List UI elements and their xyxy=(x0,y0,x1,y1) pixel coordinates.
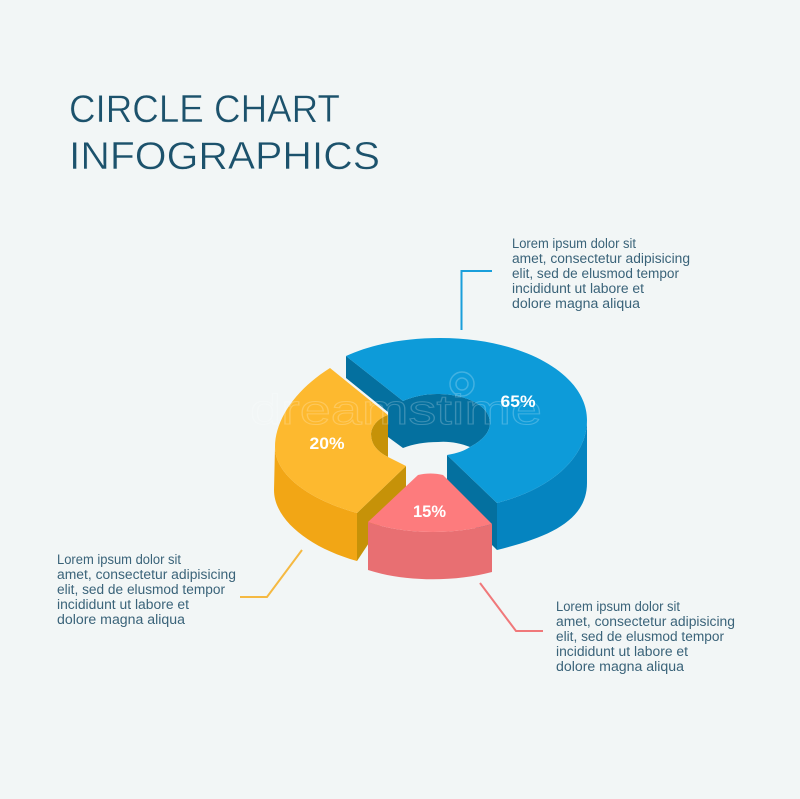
text block: bottom right: amet, consectetur adipisicing xyxy=(556,614,735,629)
text block: top right: amet, consectetur adipisicing xyxy=(512,251,690,266)
connector: blue xyxy=(462,271,492,330)
segment: yellow 20% xyxy=(274,368,406,561)
text block: left: amet, consectetur adipisicing xyxy=(57,567,236,582)
text block: bottom right: incididunt ut labore et xyxy=(556,644,688,659)
label: 15%: 15% xyxy=(413,502,446,521)
text block: top right: incididunt ut labore et xyxy=(512,281,644,296)
title: CIRCLE CHART xyxy=(69,88,340,131)
text block: top right: Lorem ipsum dolor sit xyxy=(512,236,636,251)
text block: left xyxy=(57,552,236,627)
title xyxy=(69,88,380,178)
text block: left: Lorem ipsum dolor sit xyxy=(57,552,181,567)
segment: blue 65% xyxy=(346,338,587,550)
text block: top right: elit, sed de elusmod tempor xyxy=(512,266,680,281)
text block: bottom right: dolore magna aliqua xyxy=(556,659,685,674)
title: INFOGRAPHICS xyxy=(69,135,380,178)
connector: yellow xyxy=(240,550,302,597)
text block: top right xyxy=(512,236,690,311)
text block: bottom right: elit, sed de elusmod tempor xyxy=(556,629,725,644)
label: 65%: 65% xyxy=(500,392,536,411)
text block: left: elit, sed de elusmod tempor xyxy=(57,582,226,597)
watermark: dreamstime xyxy=(250,386,542,433)
text block: bottom right xyxy=(556,599,735,674)
text block: left: dolore magna aliqua xyxy=(57,612,186,627)
text block: left: incididunt ut labore et xyxy=(57,597,189,612)
connector: pink xyxy=(480,583,543,631)
3D donut chart xyxy=(274,338,587,579)
segment: pink 15% xyxy=(368,474,492,579)
watermark xyxy=(250,372,542,433)
text block: top right: dolore magna aliqua xyxy=(512,296,641,311)
label: 20%: 20% xyxy=(310,434,344,453)
text block: bottom right: Lorem ipsum dolor sit xyxy=(556,599,680,614)
